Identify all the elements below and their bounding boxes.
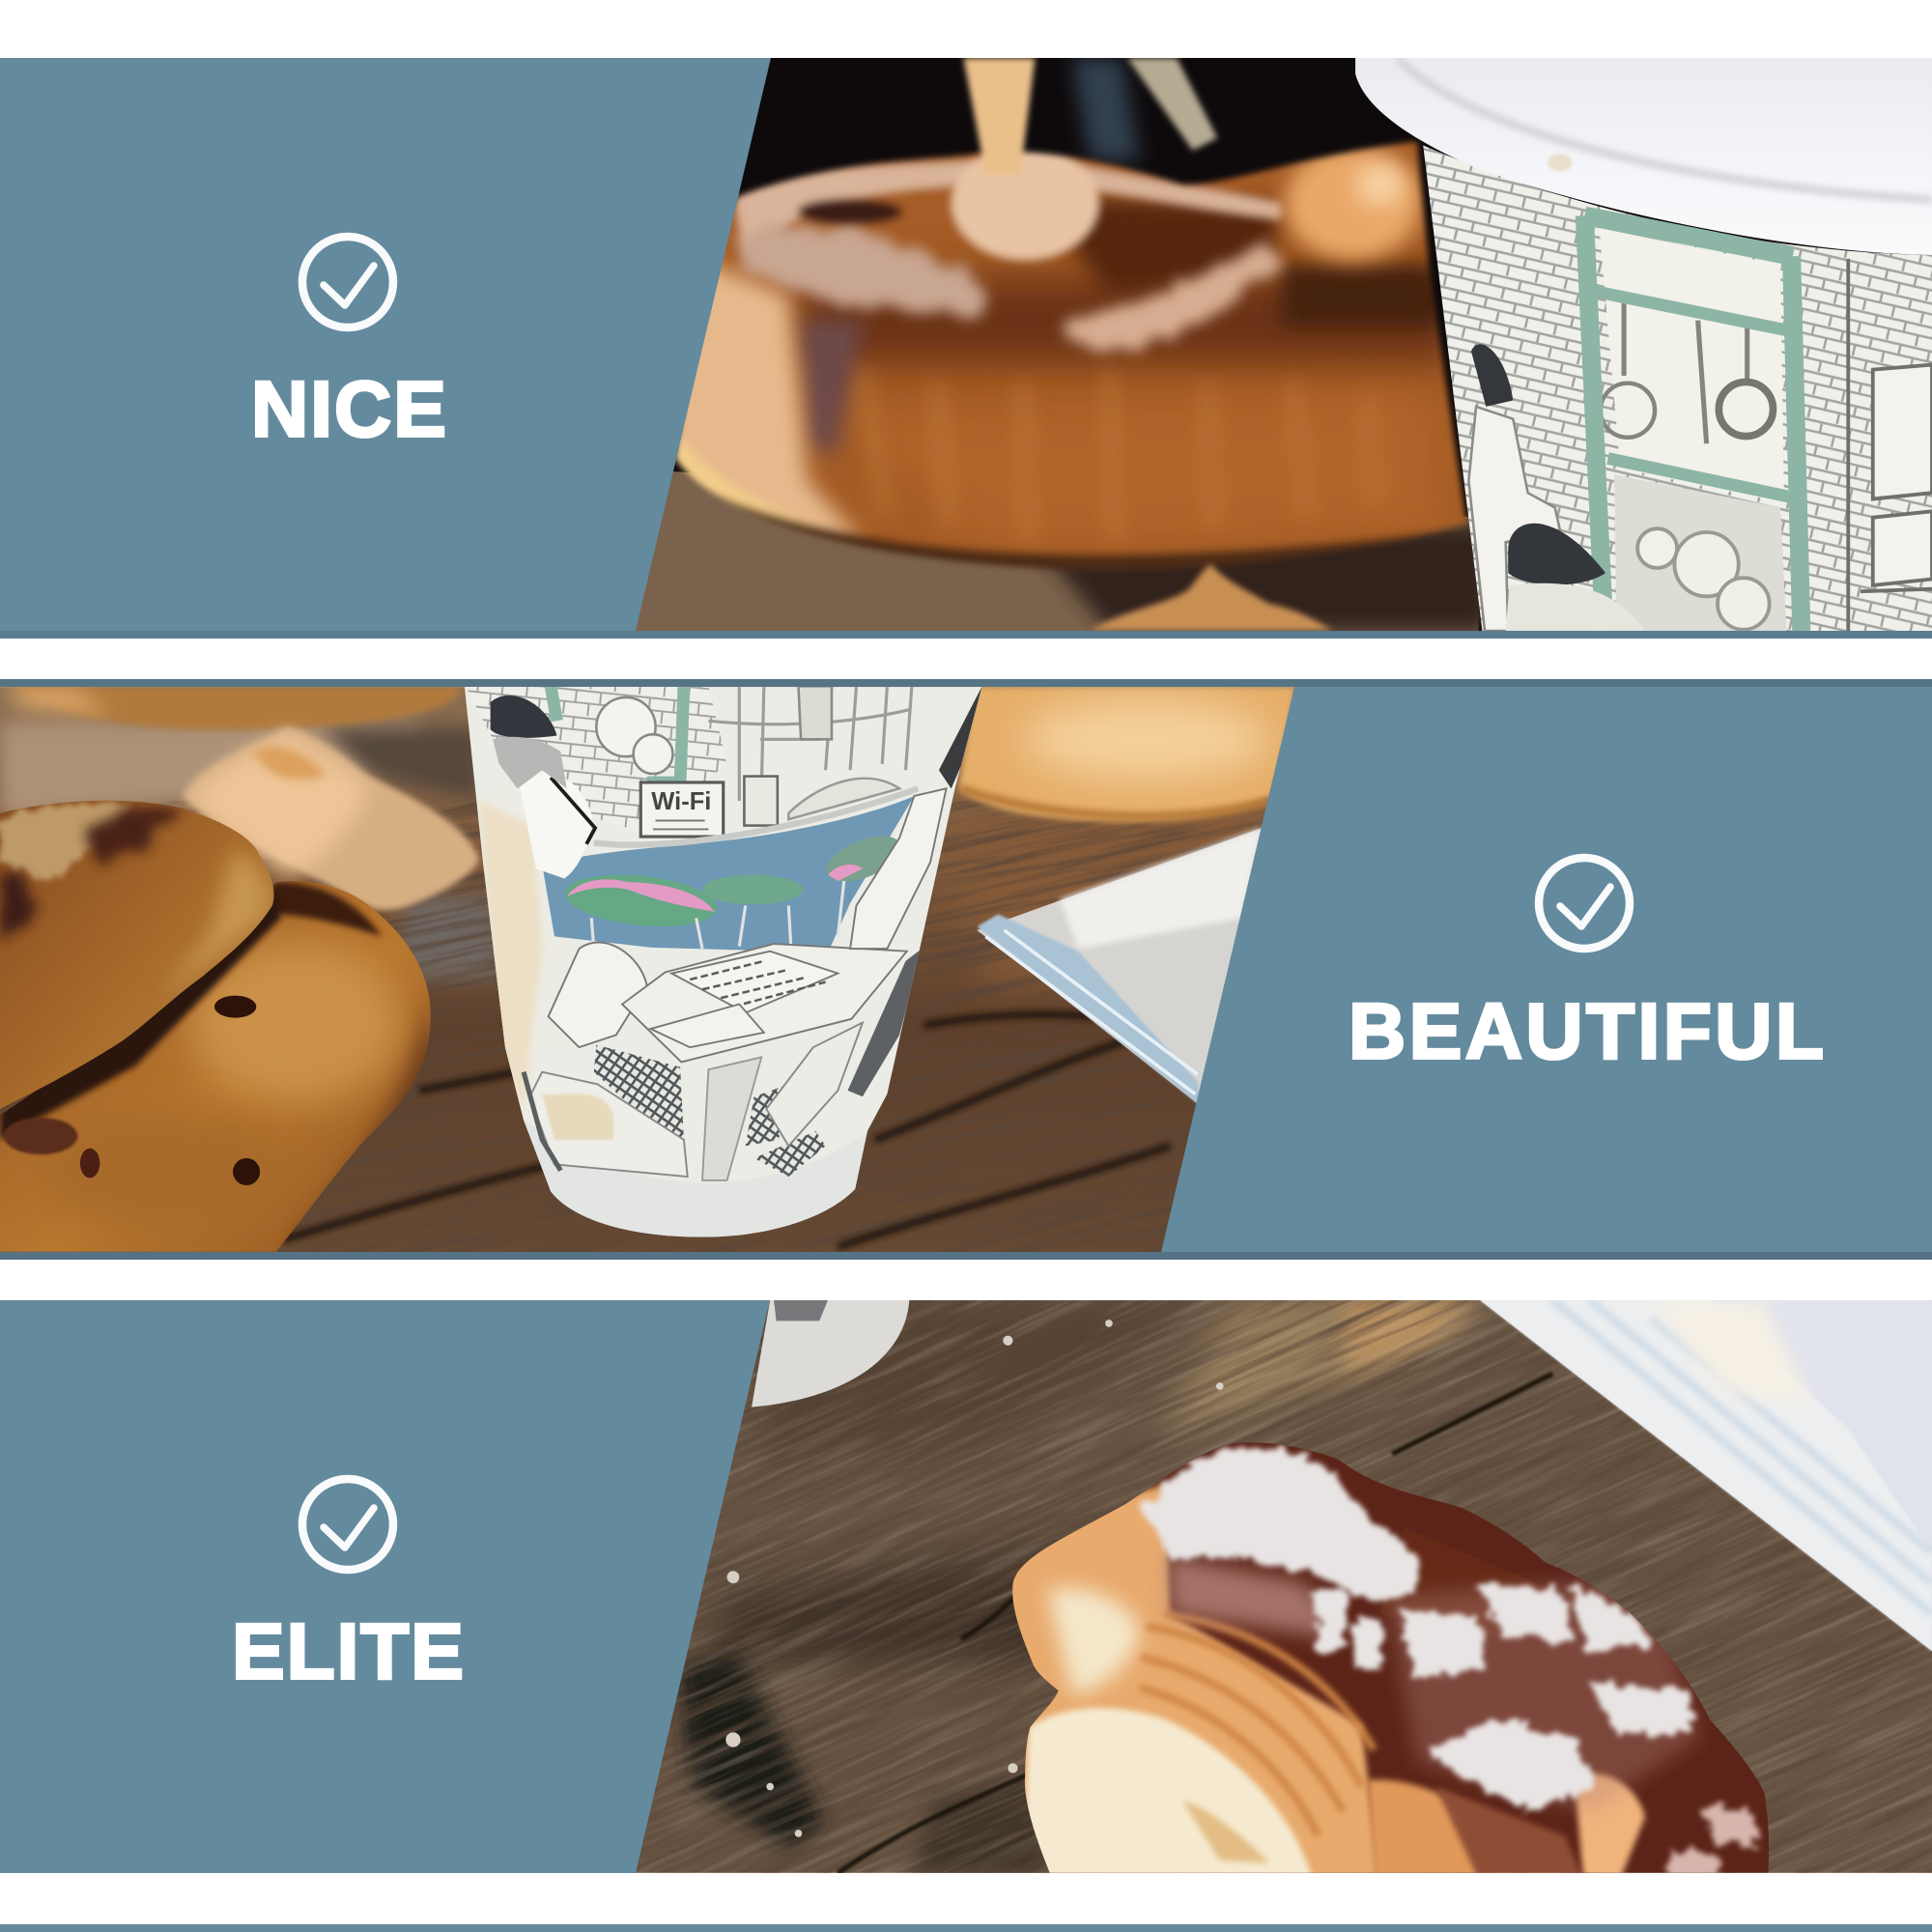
panel: elite bbox=[0, 1300, 770, 1873]
crumbs bbox=[725, 1320, 1224, 1837]
panel: beautiful bbox=[1161, 687, 1932, 1252]
rule: under row two bbox=[0, 1252, 1932, 1260]
crumb bbox=[1023, 1708, 1312, 1879]
croissant bbox=[998, 1430, 1786, 1886]
right orange bbox=[1368, 1779, 1571, 1879]
book corner bbox=[1480, 1300, 1932, 1651]
photo: pastry and printed coffee cup bbox=[616, 58, 1932, 631]
icon: check circle bbox=[302, 1479, 393, 1570]
photo: croissant on dark wood bbox=[616, 1300, 1932, 1886]
drawn table bbox=[622, 944, 907, 1062]
rule: page bottom bbox=[0, 1924, 1932, 1932]
wood highlights bbox=[616, 1300, 1932, 1873]
right side drawers bbox=[1848, 259, 1932, 631]
stick bbox=[963, 58, 1035, 175]
heading: nice: NICE bbox=[251, 365, 446, 454]
wood grain bbox=[616, 1300, 1932, 1873]
kitchen window bbox=[1600, 228, 1784, 502]
powdered sugar bbox=[1140, 1447, 1694, 1811]
rule: under row one bbox=[0, 631, 1932, 639]
sugar crust bbox=[733, 159, 1282, 259]
cup base bbox=[518, 1115, 872, 1244]
table leg bbox=[702, 1057, 761, 1180]
right pastry bbox=[958, 686, 1296, 821]
raisins bbox=[214, 996, 256, 1018]
upper roll bbox=[0, 788, 283, 1122]
cup base bbox=[752, 1300, 909, 1407]
stools bbox=[562, 868, 720, 933]
cup lid bbox=[1355, 58, 1932, 255]
far loaf bbox=[13, 686, 462, 730]
table surface bbox=[616, 469, 1479, 631]
heading: beautiful: BEAUTIFUL bbox=[1349, 987, 1824, 1076]
cup body bbox=[1423, 146, 1932, 631]
wifi sign bbox=[640, 782, 724, 837]
small pastry crumb bbox=[1091, 564, 1333, 631]
left figure bbox=[480, 777, 622, 1122]
panel: nice bbox=[0, 58, 771, 631]
blue mural band bbox=[532, 796, 914, 952]
powdered sugar halo bbox=[1166, 1555, 1700, 1811]
rule: above row two bbox=[0, 679, 1932, 687]
right figure bbox=[850, 788, 947, 949]
wifi sign: Wi-Fi bbox=[651, 788, 711, 815]
icon: check circle bbox=[1539, 858, 1630, 949]
photo: bread rolls, cup and book on wood table bbox=[0, 686, 1355, 1257]
wood grain bbox=[124, 801, 1293, 1253]
lower roll bbox=[0, 863, 443, 1257]
icon: check circle bbox=[302, 237, 393, 327]
back roll bbox=[183, 727, 479, 910]
drawn cafe interior bbox=[466, 686, 727, 832]
checked cloth bbox=[594, 1045, 684, 1140]
heading: elite: ELITE bbox=[232, 1607, 464, 1696]
small sign bbox=[744, 777, 778, 826]
book bbox=[977, 828, 1262, 1106]
orange layers bbox=[1005, 1485, 1380, 1879]
green window frame bbox=[1584, 215, 1802, 631]
cup bbox=[456, 686, 998, 1244]
pastry bbox=[666, 124, 1479, 591]
drawn figures bbox=[1471, 344, 1513, 407]
